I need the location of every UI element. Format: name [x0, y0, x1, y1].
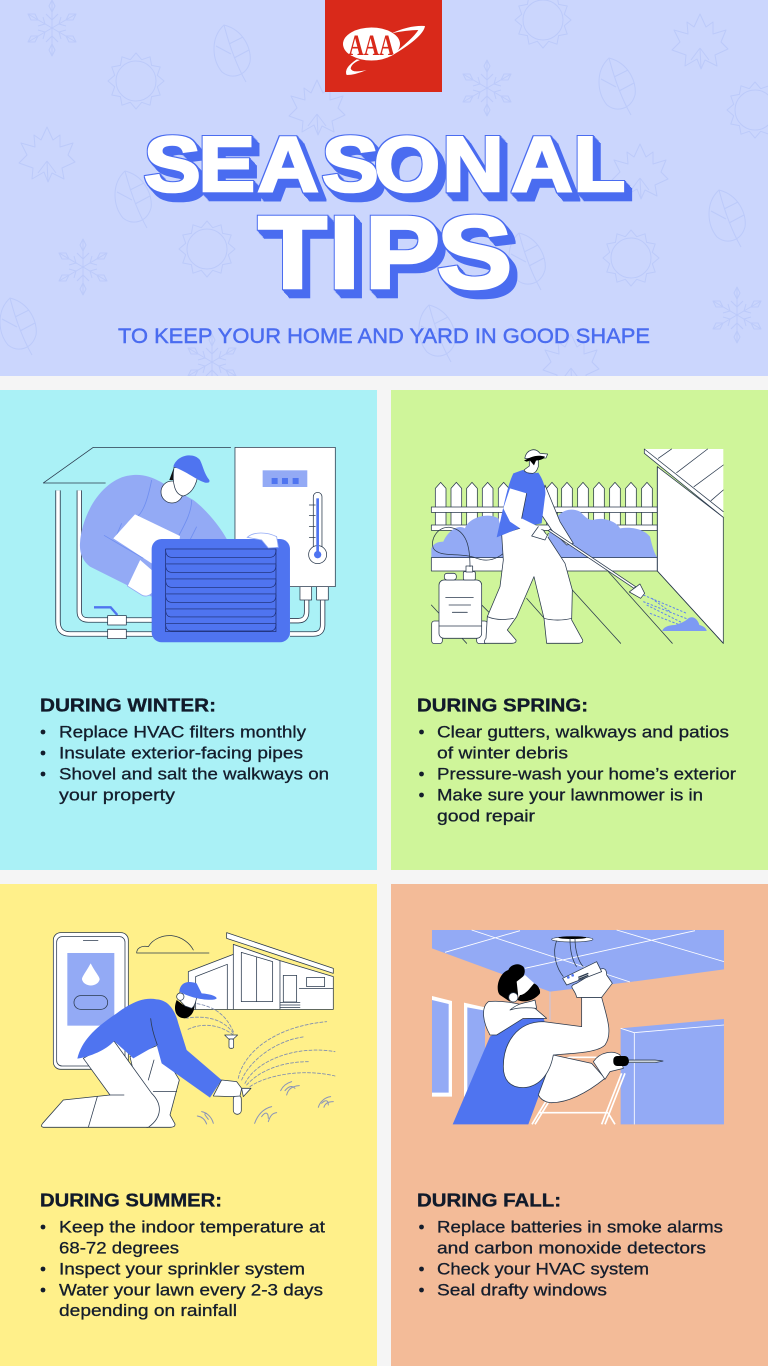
winter tips: Insulate exterior-facing pipes [59, 744, 303, 762]
fall tips: Seal drafty windows [437, 1280, 607, 1300]
panel: fall [391, 884, 768, 1366]
fall tips: Check your HVAC system [437, 1260, 649, 1278]
spring tips: good repair [437, 806, 535, 826]
summer tips: Water your lawn every 2-3 days [59, 1280, 323, 1300]
spring tips: of winter debris [437, 744, 568, 762]
summer tips: Keep the indoor temperature at [59, 1218, 325, 1236]
winter tips [40, 694, 329, 804]
spring tips: Clear gutters, walkways and patios [437, 722, 729, 742]
winter tips: your property [59, 786, 176, 804]
fall tips: Replace batteries in smoke alarms [437, 1218, 723, 1236]
logo: AAA [325, 0, 442, 92]
spring tips: Make sure your lawnmower is in [437, 786, 703, 804]
panel: winter [0, 390, 377, 870]
summer tips: depending on rainfall [59, 1301, 237, 1320]
winter tips: Shovel and salt the walkways on [59, 764, 329, 784]
spring tips [417, 694, 736, 826]
fall tips: DURING FALL: [417, 1190, 561, 1210]
subtitle: TO KEEP YOUR HOME AND YARD IN GOOD SHAPE [118, 325, 650, 348]
title: Tips: TIPS [258, 195, 512, 310]
panel: spring [391, 390, 768, 870]
logo: AAA: AAA [348, 29, 395, 62]
illustration: smoke alarm repair [432, 930, 724, 1124]
winter tips: Replace HVAC filters monthly [59, 722, 307, 742]
summer tips [40, 1190, 325, 1320]
fall tips: and carbon monoxide detectors [437, 1238, 706, 1258]
illustration: technician with HVAC unit [43, 447, 335, 642]
panel: summer [0, 884, 377, 1366]
fall tips [417, 1190, 723, 1300]
summer tips: 68-72 degrees [59, 1238, 179, 1258]
summer tips: DURING SUMMER: [40, 1190, 222, 1210]
illustration: sprinkler repair [41, 933, 335, 1127]
spring tips: DURING SPRING: [417, 694, 588, 716]
winter tips: DURING WINTER: [40, 694, 216, 716]
summer tips: Inspect your sprinkler system [59, 1260, 305, 1278]
spring tips: Pressure-wash your home’s exterior [437, 764, 736, 784]
background pattern of seasonal outline icons [0, 0, 768, 390]
illustration: pressure washing [431, 449, 723, 644]
panel: header [0, 0, 768, 390]
title: Seasonal: SEASONAL [144, 121, 625, 208]
